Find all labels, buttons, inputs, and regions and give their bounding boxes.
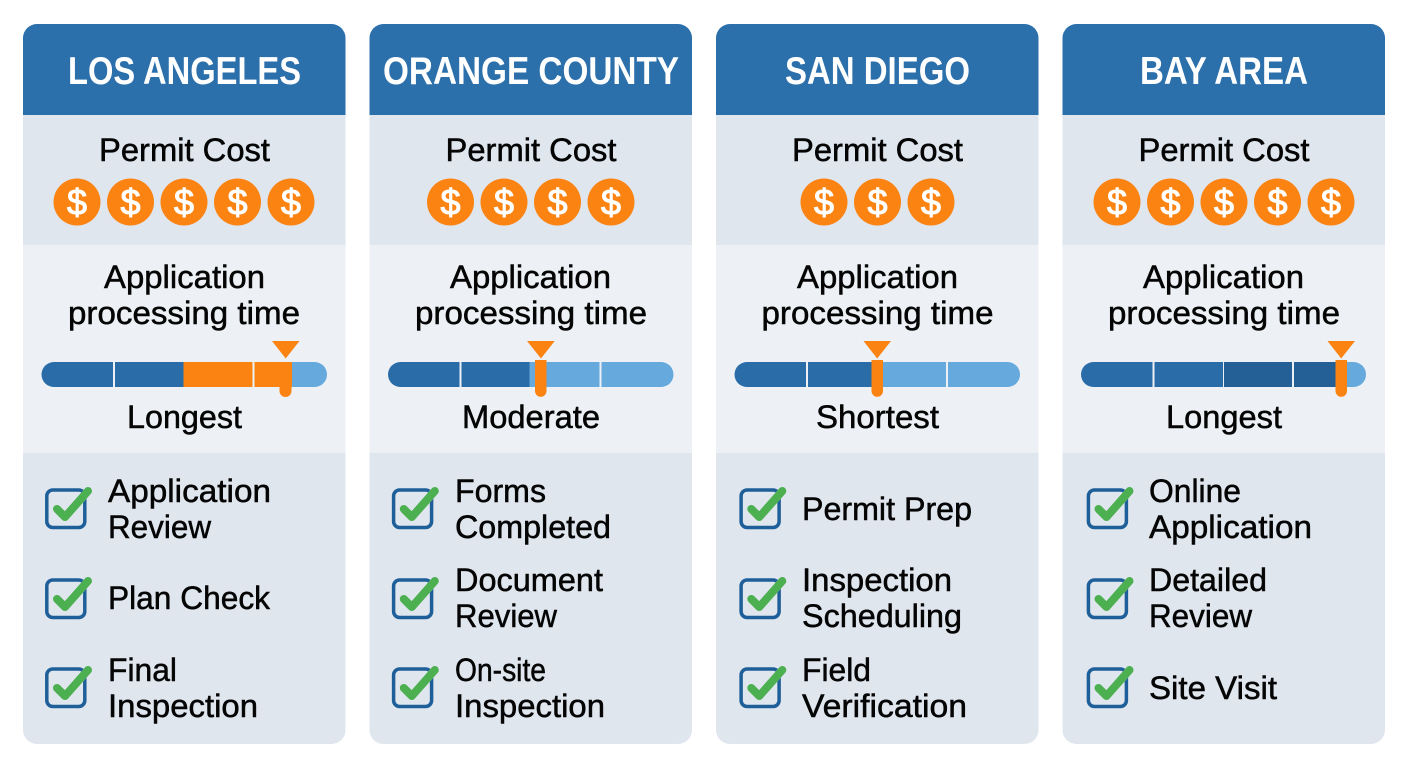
checklist item: field verification: Field xyxy=(802,652,871,688)
checklist item: online application xyxy=(1088,473,1312,545)
section background: processing time xyxy=(716,245,1038,453)
panel: Los Angeles xyxy=(23,24,346,744)
header band xyxy=(1062,24,1385,115)
section background: cost xyxy=(716,115,1038,245)
label: application processing time: processing time xyxy=(415,295,647,331)
icons: five dollar coins: $ xyxy=(174,182,194,222)
icons: five dollar coins: $ xyxy=(227,182,248,222)
icons: five dollar coins xyxy=(1094,178,1354,226)
section background: processing time xyxy=(370,245,692,453)
label: shortest: Shortest xyxy=(816,399,939,435)
icons: three dollar coins: $ xyxy=(814,182,834,222)
checklist item: forms completed: Forms xyxy=(455,473,546,509)
checklist item: inspection scheduling: Inspection xyxy=(802,562,952,598)
section background: cost xyxy=(370,115,692,245)
section background: checklist xyxy=(716,453,1038,744)
checklist item: inspection scheduling: Scheduling xyxy=(802,598,962,634)
checklist item: on-site inspection xyxy=(394,652,605,724)
section background: processing time xyxy=(23,245,346,453)
icons: five dollar coins: $ xyxy=(1267,182,1288,222)
label: application processing time xyxy=(415,259,647,331)
panel: Orange County xyxy=(370,24,692,744)
chart: processing time bar, longest xyxy=(1081,341,1366,397)
label: application processing time xyxy=(68,259,300,331)
icons: five dollar coins: $ xyxy=(1107,182,1127,222)
label: application processing time: processing time xyxy=(1108,295,1340,331)
label: application processing time: Application xyxy=(104,259,265,295)
checklist item: site visit: Site Visit xyxy=(1149,670,1277,706)
checklist item: application review: Application xyxy=(108,473,271,509)
checklist item: document review xyxy=(394,562,603,634)
heading: Los Angeles: LOS ANGELES xyxy=(68,50,301,93)
section background: checklist xyxy=(1062,453,1385,744)
checklist item: field verification xyxy=(741,652,967,724)
section background: checklist xyxy=(370,453,692,744)
icons: five dollar coins: $ xyxy=(1160,182,1181,222)
checklist item: on-site inspection: On-site xyxy=(455,652,546,688)
section background: checklist xyxy=(23,453,346,744)
label: application processing time: Application xyxy=(797,259,958,295)
icons: three dollar coins: $ xyxy=(921,182,941,222)
checklist item: online application: Application xyxy=(1149,509,1312,545)
header band xyxy=(716,24,1038,115)
label: longest: Longest xyxy=(1166,399,1282,435)
label: permit cost: Permit Cost xyxy=(99,132,270,168)
label: application processing time: Application xyxy=(1143,259,1304,295)
label: permit cost: Permit Cost xyxy=(792,132,963,168)
checklist item: application review xyxy=(47,473,271,545)
section background: cost xyxy=(1062,115,1385,245)
label: longest: Longest xyxy=(127,399,242,435)
checklist item: on-site inspection: Inspection xyxy=(455,688,605,724)
chart: processing time bar, moderate xyxy=(388,341,673,397)
heading: Orange County: ORANGE COUNTY xyxy=(383,50,679,93)
checklist item: final inspection xyxy=(47,652,258,724)
checklist item: plan check: Plan Check xyxy=(108,580,271,616)
label: permit cost: Permit Cost xyxy=(446,132,617,168)
checklist item: online application: Online xyxy=(1149,473,1241,509)
checklist item: detailed review: Detailed xyxy=(1149,562,1267,598)
label: application processing time: Application xyxy=(450,259,611,295)
header band xyxy=(370,24,692,115)
icons: five dollar coins: $ xyxy=(120,182,141,222)
checklist item: plan check xyxy=(47,580,271,618)
panel: San Diego xyxy=(716,24,1038,744)
icons: five dollar coins: $ xyxy=(67,182,87,222)
icons: four dollar coins xyxy=(427,178,634,226)
header band xyxy=(23,24,346,115)
icons: three dollar coins xyxy=(800,178,954,226)
checklist item: document review: Document xyxy=(455,562,603,598)
section background: cost xyxy=(23,115,346,245)
icons: four dollar coins: $ xyxy=(601,182,621,222)
label: moderate: Moderate xyxy=(462,399,600,435)
chart: processing time bar, longest xyxy=(41,341,327,397)
checklist item: application review: Review xyxy=(108,509,212,545)
checklist item: detailed review xyxy=(1088,562,1267,634)
checklist item: forms completed xyxy=(394,473,611,545)
checklist item: final inspection: Inspection xyxy=(108,688,258,724)
checklist item: document review: Review xyxy=(455,598,558,634)
label: application processing time xyxy=(762,259,994,331)
checklist item: site visit xyxy=(1088,669,1277,706)
section background: processing time xyxy=(1062,245,1385,453)
icons: five dollar coins: $ xyxy=(1214,182,1234,222)
label: permit cost: Permit Cost xyxy=(1138,132,1310,168)
icons: five dollar coins: $ xyxy=(281,182,301,222)
heading: San Diego: SAN DIEGO xyxy=(785,50,970,93)
checklist item: field verification: Verification xyxy=(802,688,967,724)
checklist item: permit prep: Permit Prep xyxy=(802,491,972,527)
label: application processing time: processing time xyxy=(762,295,994,331)
icons: four dollar coins: $ xyxy=(494,182,514,222)
label: application processing time: processing time xyxy=(68,295,300,331)
checklist item: forms completed: Completed xyxy=(455,509,611,545)
icons: four dollar coins: $ xyxy=(547,182,568,222)
checklist item: detailed review: Review xyxy=(1149,598,1253,634)
checklist item: final inspection: Final xyxy=(108,652,177,688)
checklist item: inspection scheduling xyxy=(741,562,962,634)
panel: Bay Area xyxy=(1062,24,1385,744)
icons: five dollar coins: $ xyxy=(1321,182,1341,222)
label: application processing time xyxy=(1108,259,1340,331)
heading: Bay Area: BAY AREA xyxy=(1140,50,1308,93)
icons: three dollar coins: $ xyxy=(867,182,888,222)
icons: five dollar coins xyxy=(54,178,314,226)
icons: four dollar coins: $ xyxy=(440,182,461,222)
chart: processing time bar, shortest xyxy=(734,341,1020,397)
